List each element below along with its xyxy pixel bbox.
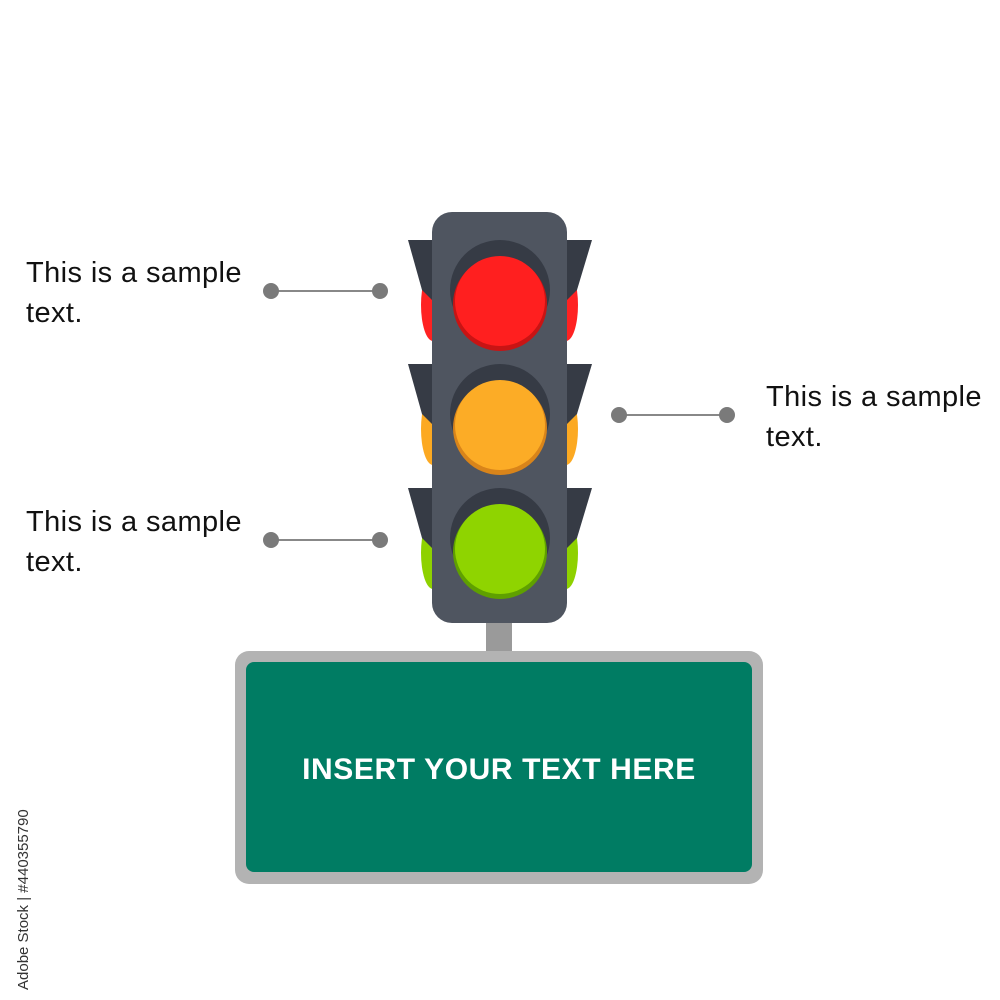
text: right: text. <box>766 421 823 453</box>
sign: INSERT YOUR TEXT HERE <box>302 753 696 786</box>
text: left top: text. <box>26 297 83 329</box>
watermark id: Adobe Stock | #440355790 <box>15 809 32 990</box>
text: left top: This is a sample <box>26 257 242 289</box>
traffic light <box>408 212 592 623</box>
text: right: This is a sample <box>766 381 982 413</box>
text: left bottom: This is a sample <box>26 506 242 538</box>
housing <box>432 212 567 623</box>
red light <box>453 257 547 351</box>
amber light <box>453 381 547 475</box>
connector: left bottom <box>263 532 388 548</box>
sign <box>235 651 763 884</box>
text: left top <box>26 257 242 329</box>
text: right <box>766 381 982 453</box>
connector: right <box>611 407 735 423</box>
pole <box>486 615 512 655</box>
text: left bottom: text. <box>26 546 83 578</box>
connector: left top <box>263 283 388 299</box>
green light <box>453 505 547 599</box>
text: left bottom <box>26 506 242 578</box>
